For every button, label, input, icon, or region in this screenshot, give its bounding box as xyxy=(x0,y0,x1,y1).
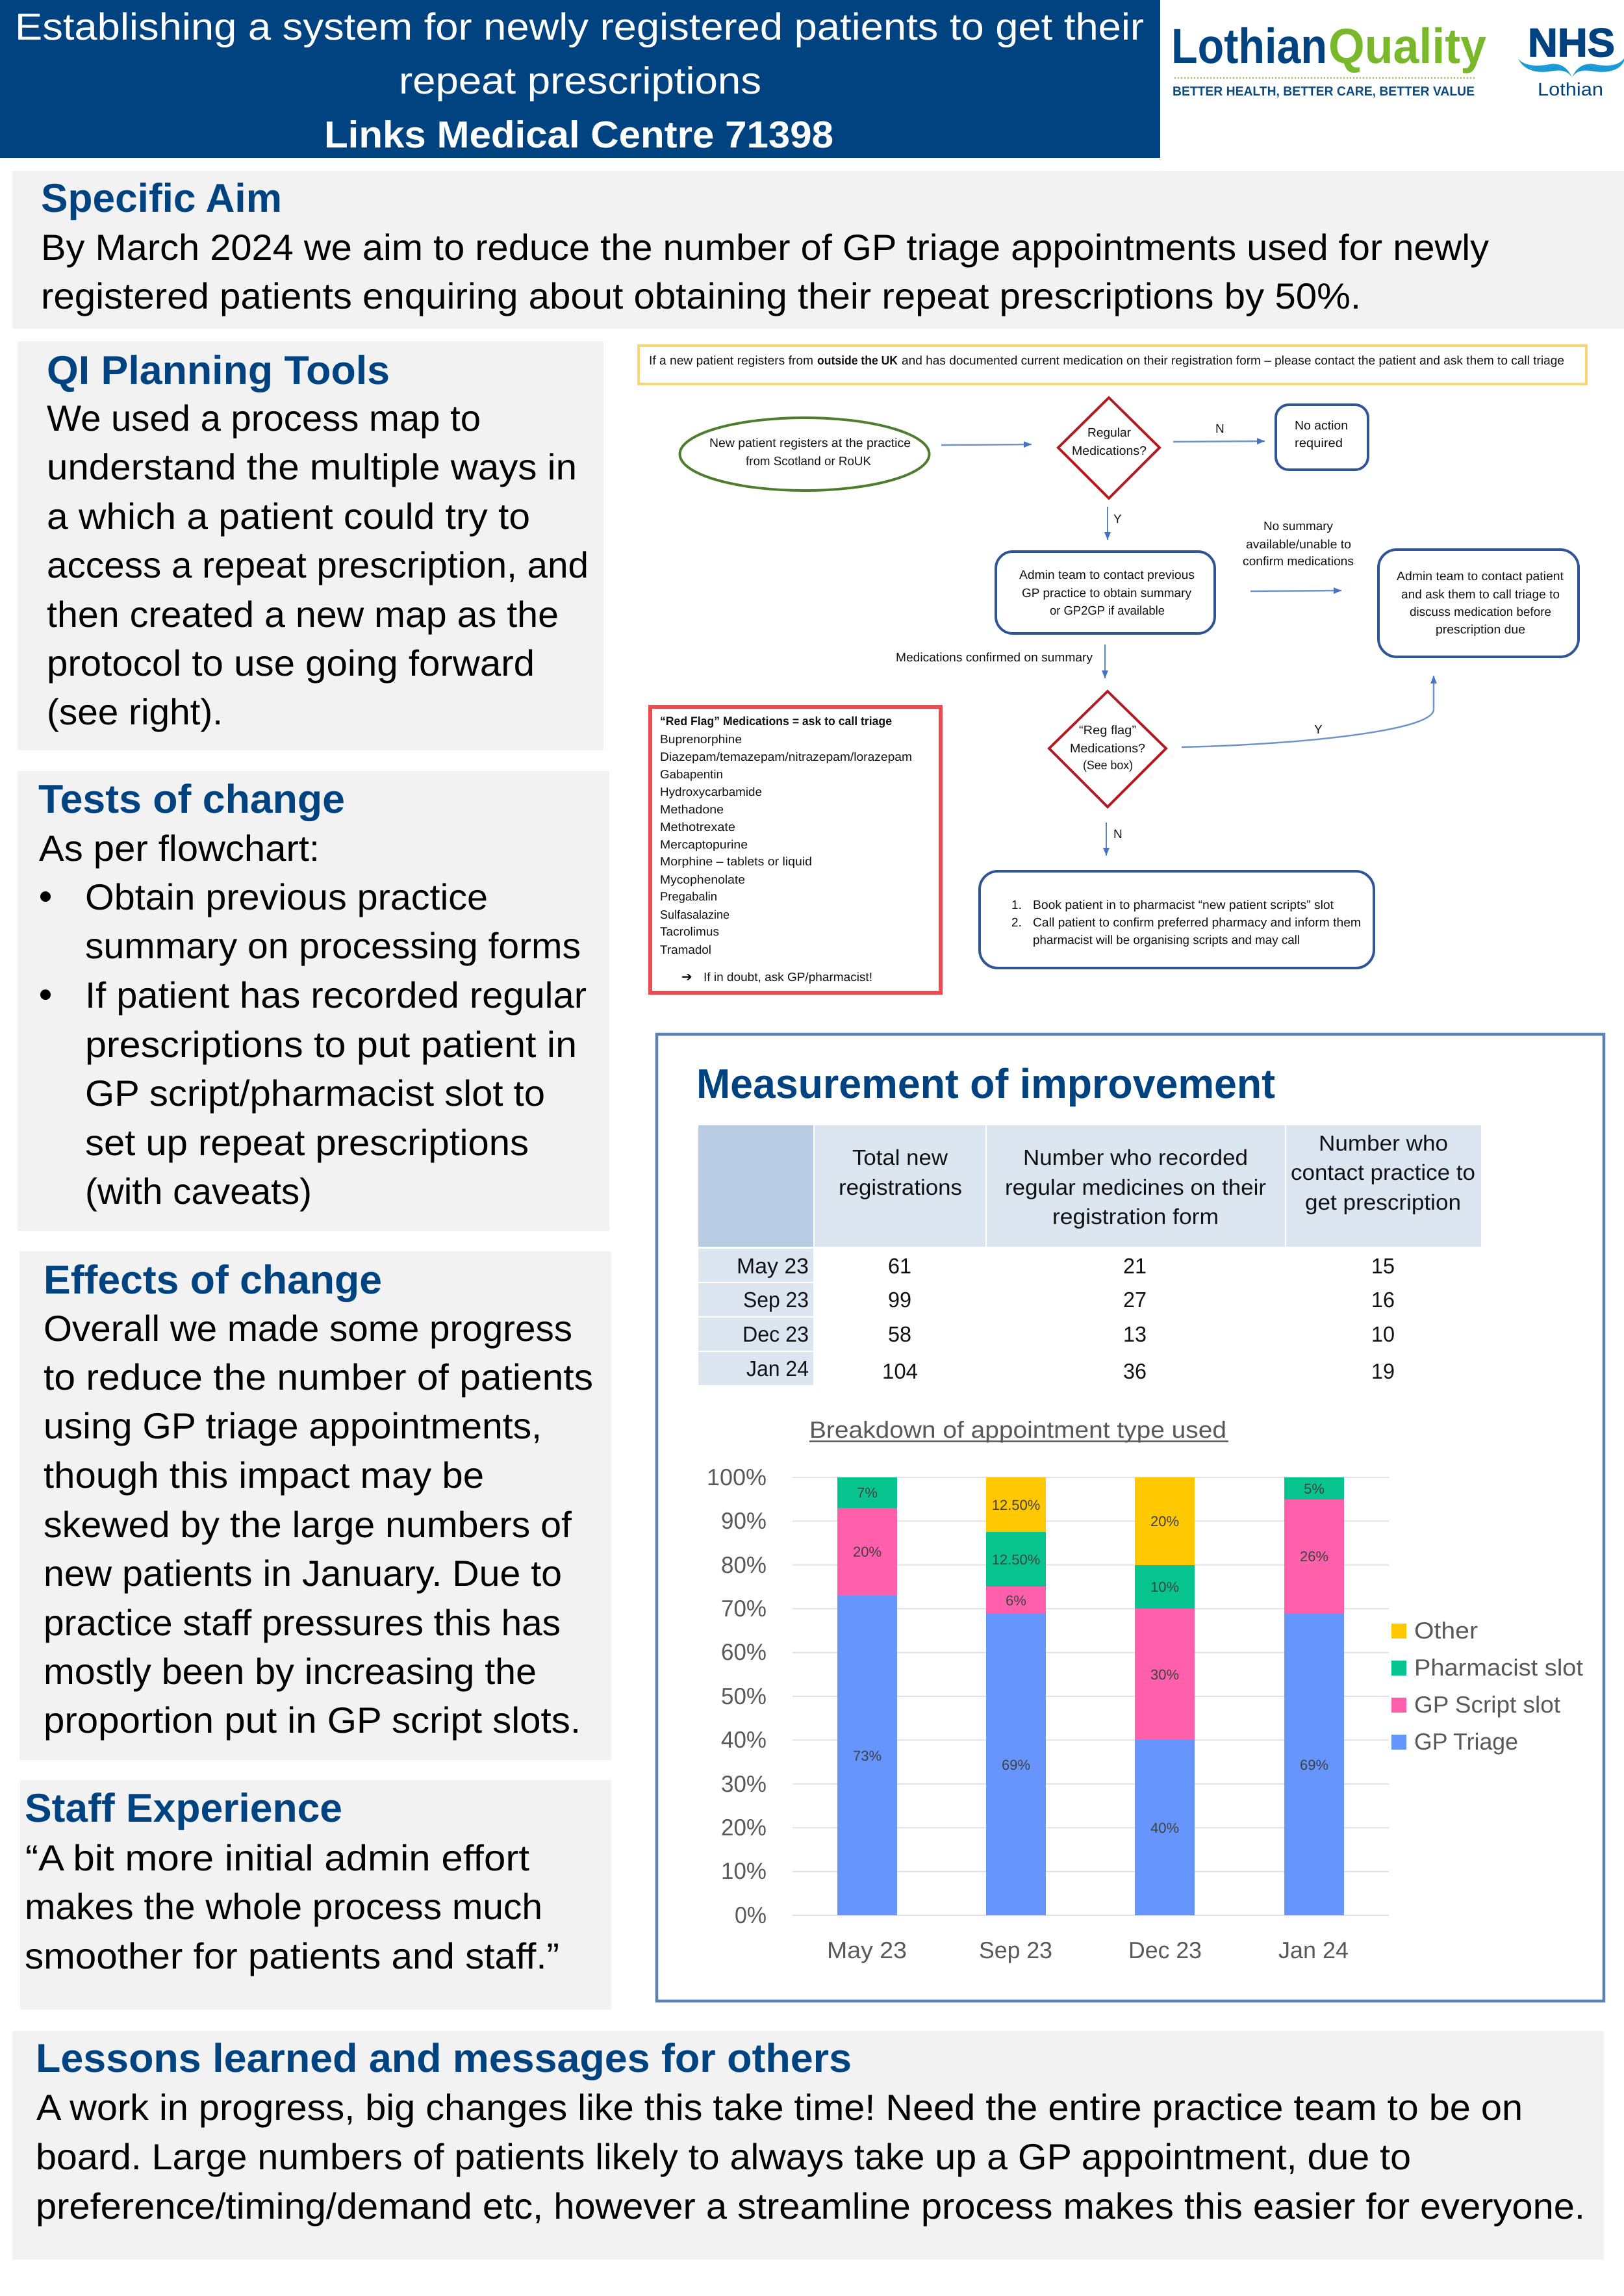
x axis labels xyxy=(827,1937,1349,1963)
x axis labels: Dec 23 xyxy=(1128,1937,1202,1963)
title: Links Medical Centre 71398 xyxy=(324,114,833,156)
text: QI planning body: understand the multiple ways in xyxy=(47,446,577,487)
y axis labels: 30% xyxy=(721,1770,767,1797)
text: effects body: to reduce the number of patients xyxy=(44,1357,593,1397)
table: registrations by month: get prescription xyxy=(1305,1191,1461,1215)
panel: red flag medications list: Hydroxycarbamide xyxy=(660,785,762,798)
arrow: no branch: N xyxy=(1215,422,1224,436)
y axis labels: 90% xyxy=(721,1507,767,1534)
text: tests body: As per flowchart: xyxy=(39,828,320,869)
start node: new patient registers xyxy=(679,418,929,491)
box: contact patient and call triage xyxy=(1378,550,1579,657)
label: no summary available: No summary xyxy=(1263,520,1333,533)
decision: regular medications: Medications? xyxy=(1072,444,1147,458)
arrow: red flag yes curve: Y xyxy=(1314,723,1323,737)
text: QI planning body: protocol to use going forward xyxy=(47,643,535,683)
logo: Lothian Quality: Lothian xyxy=(1171,19,1327,74)
box: book pharmacist slot: 2. xyxy=(1011,916,1022,930)
text: staff quote xyxy=(25,1837,559,1976)
legend: Other xyxy=(1414,1617,1478,1644)
callout: outside the UK note xyxy=(639,346,1586,384)
table: registrations by month: 15 xyxy=(1371,1255,1395,1279)
table: registrations by month: Jan 24 xyxy=(746,1357,809,1381)
title xyxy=(15,6,1144,156)
box: book pharmacist slot xyxy=(980,871,1374,968)
decision: red flag medications xyxy=(1049,691,1166,807)
table: registrations by month: 19 xyxy=(1371,1360,1395,1384)
panel: effects of change xyxy=(19,1251,611,1760)
table: registrations by month: contact practice to xyxy=(1291,1161,1475,1185)
text: QI planning body: then created a new map as the xyxy=(47,594,559,635)
text: tests body xyxy=(39,828,587,1212)
bar: Jan 24: 26% xyxy=(1300,1548,1328,1564)
table: registrations by month: 99 xyxy=(888,1288,911,1312)
decision: regular medications: Regular xyxy=(1087,426,1132,440)
panel: red flag medications list: Pregabalin xyxy=(660,889,717,903)
y axis labels: 0% xyxy=(735,1902,767,1928)
bar: May 23: 20% xyxy=(853,1544,882,1560)
text: QI planning body: a which a patient could try to xyxy=(47,496,530,537)
text: lessons body: board. Large numbers of patients likely to always take up a GP appointment, due to xyxy=(36,2136,1411,2177)
arrow: yes branch: Y xyxy=(1113,513,1122,526)
table: registrations by month: 104 xyxy=(882,1360,918,1384)
text: effects body: skewed by the large numbers of xyxy=(44,1504,572,1545)
bar: Dec 23: 10% xyxy=(1150,1579,1179,1595)
box: book pharmacist slot: Call patient to confirm preferred pharmacy and inform them xyxy=(1033,916,1361,930)
text: effects body: practice staff pressures this has xyxy=(44,1602,561,1643)
table: registrations by month: 27 xyxy=(1123,1288,1147,1312)
text: lessons body xyxy=(36,2087,1585,2226)
table: registrations by month: 61 xyxy=(888,1255,911,1279)
panel: staff experience xyxy=(20,1780,611,2009)
flowchart: process map xyxy=(639,346,1586,993)
logo: Lothian Quality: Quality xyxy=(1328,19,1486,74)
text: QI planning body: access a repeat prescription, and xyxy=(47,544,589,585)
bar: Sep 23: 12.50% xyxy=(992,1497,1040,1513)
text: effects body: though this impact may be xyxy=(44,1455,484,1496)
panel: red flag medications list: Mycophenolate xyxy=(660,873,745,886)
text: aim statement xyxy=(41,227,1489,316)
box: admin team contact previous practice: GP practice to obtain summary xyxy=(1022,587,1191,600)
text: tests body: set up repeat prescriptions xyxy=(85,1122,529,1163)
bar chart: appointment type by month xyxy=(707,1464,1583,1963)
heading: staff experience: Staff Experience xyxy=(25,1786,342,1831)
bar: Jan 24: 5% xyxy=(1304,1481,1325,1497)
text: tests body: Obtain previous practice xyxy=(85,876,488,917)
box: no action required: No action xyxy=(1295,419,1348,433)
start node: new patient registers: from Scotland or RoUK xyxy=(746,455,871,468)
label: no summary available xyxy=(1243,520,1354,568)
text: QI planning body: (see right). xyxy=(47,691,223,732)
decision: red flag medications: Medications? xyxy=(1070,742,1145,756)
bar: Sep 23: 69% xyxy=(1002,1757,1030,1773)
text: staff quote: makes the whole process much xyxy=(25,1886,542,1927)
box: no action required: required xyxy=(1295,437,1343,450)
y axis labels: 70% xyxy=(721,1595,767,1622)
text: staff quote: smoother for patients and staff.” xyxy=(25,1935,559,1976)
callout: outside the UK note: If a new patient registers from xyxy=(649,354,813,368)
x axis labels: Jan 24 xyxy=(1278,1937,1349,1963)
heading: specific aim: Specific Aim xyxy=(41,176,282,221)
panel: red flag medications list: Buprenorphine xyxy=(660,732,742,746)
panel: lessons learned xyxy=(12,2031,1604,2260)
table: registrations by month: Sep 23 xyxy=(743,1288,809,1312)
bar: May 23: 7% xyxy=(857,1485,878,1501)
box: contact patient and call triage: and ask them to call triage to xyxy=(1401,588,1560,602)
text: effects body: proportion put in GP script slots. xyxy=(44,1700,581,1741)
table: registrations by month: 21 xyxy=(1123,1255,1147,1279)
panel: red flag medications list: “Red Flag” Medications = ask to call triage xyxy=(660,714,892,728)
label: medications confirmed on summary: Medications confirmed on summary xyxy=(896,651,1093,665)
title: repeat prescriptions xyxy=(399,60,761,102)
logo: Lothian Quality xyxy=(1171,19,1486,99)
label: no summary available: available/unable to xyxy=(1246,538,1351,552)
legend xyxy=(1391,1617,1583,1755)
panel: red flag medications list: Morphine – tablets or liquid xyxy=(660,854,812,868)
panel: red flag medications list: Tramadol xyxy=(660,943,711,956)
text: tests body: GP script/pharmacist slot to xyxy=(85,1073,545,1114)
text: effects body: new patients in January. Due to xyxy=(44,1553,562,1594)
box: contact patient and call triage: discuss medication before xyxy=(1410,606,1551,619)
y axis labels: 40% xyxy=(721,1726,767,1753)
chart title: breakdown of appointment type: Breakdown of appointment type used xyxy=(809,1416,1226,1443)
box: admin team contact previous practice: Admin team to contact previous xyxy=(1019,568,1195,582)
box: contact patient and call triage: prescription due xyxy=(1436,623,1525,637)
start node: new patient registers: New patient registers at the practice xyxy=(709,437,911,450)
label: no summary available: confirm medications xyxy=(1243,555,1354,568)
panel: QI planning tools xyxy=(18,341,603,750)
panel: red flag medications list: If in doubt, ask GP/pharmacist! xyxy=(704,970,872,984)
table: registrations by month: May 23 xyxy=(737,1255,809,1279)
box: no action required xyxy=(1276,405,1368,470)
heading: QI planning tools: QI Planning Tools xyxy=(47,348,390,393)
y axis labels: 60% xyxy=(721,1639,767,1665)
box: book pharmacist slot: Book patient in to pharmacist “new patient scripts” slot xyxy=(1033,899,1334,912)
arrow: red flag no branch: N xyxy=(1113,828,1123,841)
heading: tests of change: Tests of change xyxy=(38,777,345,822)
text: aim statement: registered patients enquiring about obtaining their repeat prescriptions by 50%. xyxy=(41,275,1361,316)
table: registrations by month: Number who recorded xyxy=(1023,1146,1248,1170)
text: tests body: summary on processing forms xyxy=(85,925,581,966)
bar: May 23: 73% xyxy=(853,1748,882,1764)
text: effects body: Overall we made some progress xyxy=(44,1308,572,1349)
table: registrations by month: Number who xyxy=(1319,1132,1448,1156)
table: registrations by month: regular medicines on their xyxy=(1005,1176,1266,1200)
logo: NHS Lothian: Lothian xyxy=(1538,79,1603,99)
bar: Sep 23: 6% xyxy=(1006,1592,1026,1609)
y axis labels: 100% xyxy=(707,1464,767,1490)
bar: May 23 xyxy=(837,1477,897,1915)
table: registrations by month: 36 xyxy=(1123,1360,1147,1384)
text: tests body: (with caveats) xyxy=(85,1171,312,1212)
table: registrations by month: 13 xyxy=(1123,1323,1147,1347)
text: staff quote: “A bit more initial admin effort xyxy=(25,1837,529,1878)
logo: NHS Lothian: NHS xyxy=(1528,21,1615,66)
bar: Jan 24 xyxy=(1284,1477,1344,1915)
box: admin team contact previous practice xyxy=(996,552,1215,633)
arrow: red flag no branch xyxy=(1106,823,1123,856)
table: registrations by month: 10 xyxy=(1371,1323,1395,1347)
arrow: red flag yes curve xyxy=(1182,676,1434,747)
bar: Jan 24: 69% xyxy=(1300,1757,1328,1773)
decision: red flag medications: (See box) xyxy=(1083,759,1133,772)
table: registrations by month: Total new xyxy=(852,1146,948,1170)
callout: outside the UK note: and has documented current medication on their registration form – please contact the patient and ask them to call triage xyxy=(902,354,1564,368)
panel: specific aim xyxy=(12,171,1624,329)
table: registrations by month: 58 xyxy=(888,1323,911,1347)
panel: measurement of improvement xyxy=(657,1034,1604,2001)
bar: Sep 23 xyxy=(986,1477,1046,1915)
heading: lessons learned: Lessons learned and messages for others xyxy=(36,2036,852,2081)
text: lessons body: preference/timing/demand etc, however a streamline process makes this easier for everyone. xyxy=(36,2186,1585,2226)
bar: Sep 23: 12.50% xyxy=(992,1551,1040,1568)
table: registrations by month: 16 xyxy=(1371,1288,1395,1312)
table: registrations by month xyxy=(698,1125,1481,1385)
text: aim statement: By March 2024 we aim to reduce the number of GP triage appointments used for newly xyxy=(41,227,1489,268)
decision: red flag medications: “Reg flag” xyxy=(1079,724,1136,737)
text: effects body: mostly been by increasing the xyxy=(44,1651,537,1692)
panel: red flag medications list: Gabapentin xyxy=(660,767,723,781)
text: effects body xyxy=(44,1308,593,1741)
panel: red flag medications list: Methadone xyxy=(660,802,724,816)
panel: red flag medications list: Tacrolimus xyxy=(660,925,719,938)
heading: measurement of improvement: Measurement of improvement xyxy=(696,1060,1275,1107)
bar: Dec 23: 40% xyxy=(1150,1820,1179,1836)
table: registrations by month: Dec 23 xyxy=(742,1323,809,1347)
logo: NHS Lothian xyxy=(1518,21,1624,99)
heading: effects of change: Effects of change xyxy=(44,1258,382,1303)
arrow: yes branch xyxy=(1108,507,1122,540)
bar: Dec 23 xyxy=(1135,1477,1195,1915)
y axis labels: 20% xyxy=(721,1814,767,1841)
y axis labels xyxy=(707,1464,767,1928)
box: book pharmacist slot: pharmacist will be organising scripts and may call xyxy=(1033,934,1300,947)
table: registrations by month: registration form xyxy=(1052,1205,1219,1229)
arrow: start to regular medications xyxy=(941,444,1032,445)
logo: Lothian Quality: BETTER HEALTH, BETTER CARE, BETTER VALUE xyxy=(1173,84,1475,99)
panel: red flag medications list: Sulfasalazine xyxy=(660,908,730,921)
x axis labels: Sep 23 xyxy=(979,1937,1052,1963)
y axis labels: 10% xyxy=(721,1857,767,1884)
text: effects body: using GP triage appointments, xyxy=(44,1405,542,1446)
text: QI planning body: We used a process map to xyxy=(47,398,481,439)
box: contact patient and call triage: Admin team to contact patient xyxy=(1397,570,1564,583)
legend: GP Triage xyxy=(1414,1728,1518,1755)
x axis labels: May 23 xyxy=(827,1937,907,1963)
panel: red flag medications list: ➔ xyxy=(681,969,692,984)
y axis labels: 50% xyxy=(721,1683,767,1709)
panel: red flag medications list: Diazepam/temazepam/nitrazepam/lorazepam xyxy=(660,750,912,763)
arrow: medications confirmed xyxy=(1104,644,1106,678)
y axis labels: 80% xyxy=(721,1551,767,1578)
text: tests body: If patient has recorded regular xyxy=(85,975,587,1015)
callout: outside the UK note: outside the UK xyxy=(817,354,898,368)
header banner xyxy=(0,0,1160,158)
title: Establishing a system for newly registered patients to get their xyxy=(15,6,1144,48)
text: QI planning body xyxy=(47,398,589,732)
decision: regular medications xyxy=(1058,398,1160,498)
box: book pharmacist slot: 1. xyxy=(1011,899,1022,912)
bar: Dec 23: 30% xyxy=(1150,1666,1179,1683)
panel: tests of change xyxy=(18,771,609,1231)
panel: red flag medications list xyxy=(650,707,941,993)
text: tests body: prescriptions to put patient in xyxy=(85,1024,577,1065)
panel: red flag medications list: Mercaptopurine xyxy=(660,837,748,851)
box: admin team contact previous practice: or GP2GP if available xyxy=(1050,604,1165,618)
table: registrations by month: registrations xyxy=(839,1176,962,1200)
legend: Pharmacist slot xyxy=(1414,1654,1583,1681)
legend: GP Script slot xyxy=(1414,1691,1560,1718)
bar: Dec 23: 20% xyxy=(1150,1513,1179,1529)
text: lessons body: A work in progress, big changes like this take time! Need the entire practice team to be on xyxy=(36,2087,1523,2128)
panel: red flag medications list: Methotrexate xyxy=(660,820,735,834)
